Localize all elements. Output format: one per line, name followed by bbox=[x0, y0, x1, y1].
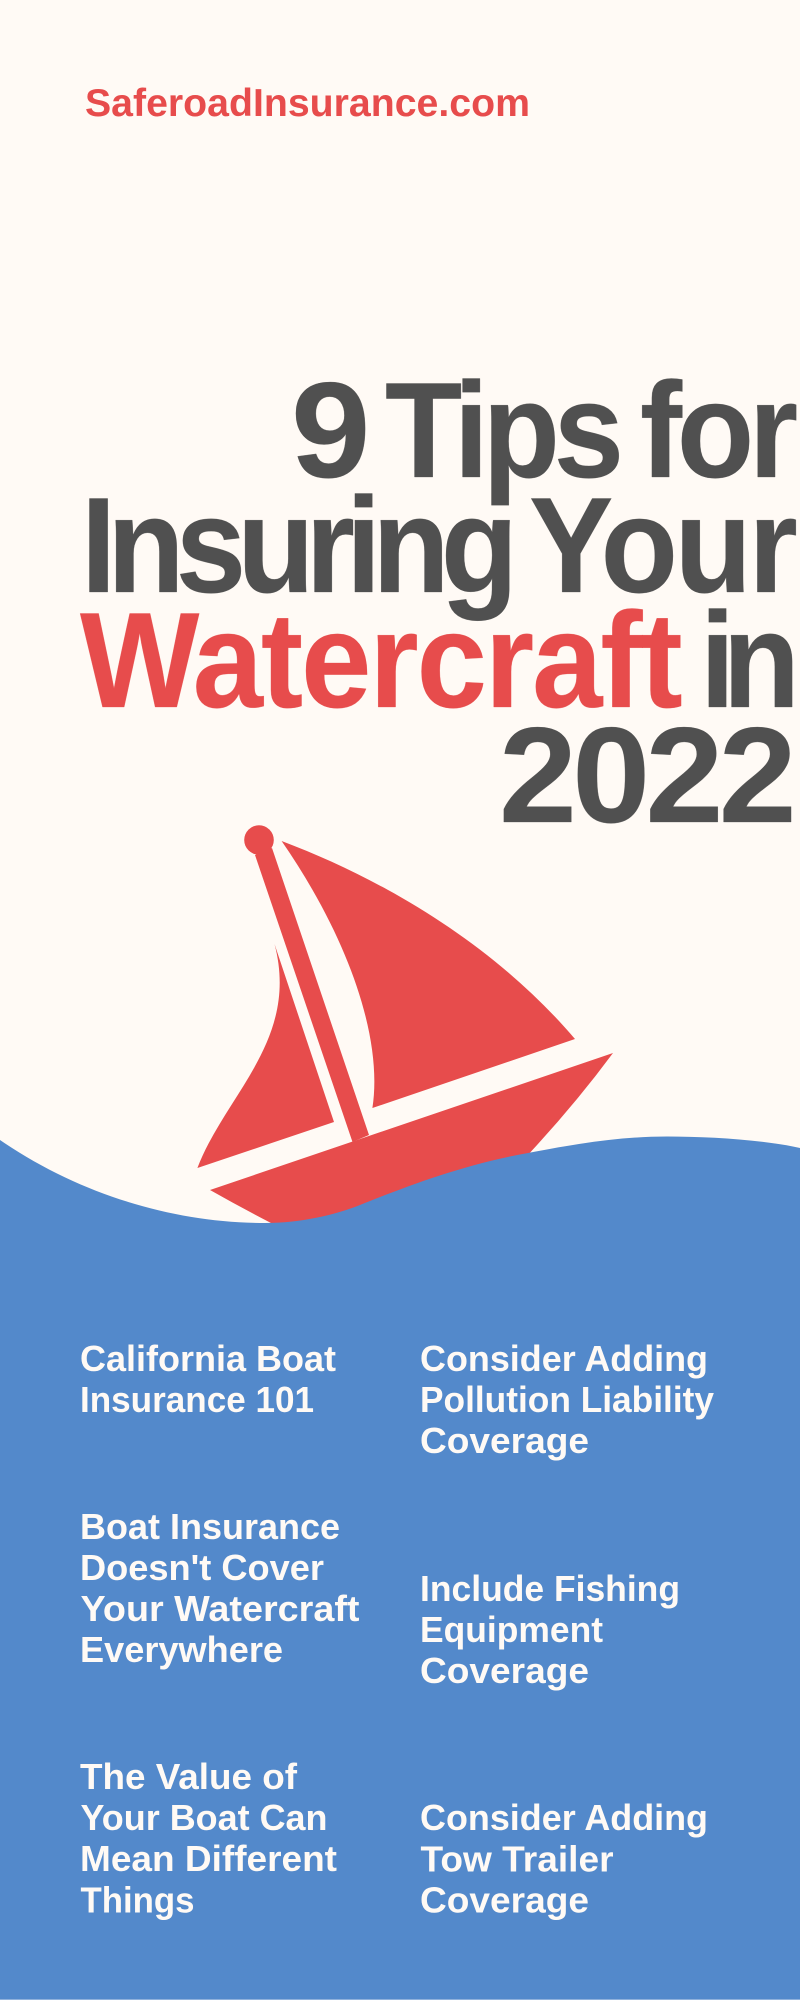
tip: Consider Adding Pollution Liability Coverage bbox=[420, 1338, 714, 1461]
tip: Boat Insurance Doesn't Cover Your Watercraft Everywhere bbox=[80, 1506, 360, 1670]
tip: Consider Adding Tow Trailer Coverage: Tow Trailer bbox=[420, 1838, 614, 1880]
brand heading: website name: SaferoadInsurance.com bbox=[85, 82, 530, 125]
title bbox=[80, 354, 800, 852]
tip: Consider Adding Pollution Liability Coverage: Coverage bbox=[420, 1420, 589, 1461]
title: 9 bbox=[291, 354, 370, 506]
tip: The Value of Your Boat Can Mean Different Things: The Value of bbox=[80, 1756, 298, 1797]
tip: California Boat Insurance 101: Insurance 101 bbox=[80, 1379, 314, 1420]
title: Your bbox=[529, 469, 798, 621]
tip: California Boat Insurance 101: California Boat bbox=[80, 1338, 336, 1379]
tip: Boat Insurance Doesn't Cover Your Watercraft Everywhere: Your Watercraft bbox=[80, 1588, 360, 1629]
tip: Include Fishing Equipment Coverage: Equipment bbox=[420, 1609, 603, 1650]
title: Tips bbox=[385, 354, 624, 506]
icon: red sailboat bbox=[197, 825, 613, 1223]
tip: Boat Insurance Doesn't Cover Your Watercraft Everywhere: Doesn't Cover bbox=[80, 1547, 324, 1588]
tip: The Value of Your Boat Can Mean Different Things: Your Boat Can bbox=[80, 1797, 328, 1838]
tip: Consider Adding Tow Trailer Coverage bbox=[420, 1797, 708, 1920]
tip: Include Fishing Equipment Coverage: Coverage bbox=[420, 1650, 589, 1691]
title: Watercraft bbox=[80, 584, 683, 736]
tip: California Boat Insurance 101 bbox=[80, 1338, 336, 1420]
tip: Consider Adding Tow Trailer Coverage: Consider Adding bbox=[420, 1797, 708, 1838]
tip: The Value of Your Boat Can Mean Different Things: Things bbox=[80, 1880, 194, 1920]
tip: Consider Adding Pollution Liability Coverage: Pollution Liability bbox=[420, 1379, 714, 1420]
title: 2022 bbox=[499, 700, 797, 852]
tip: Consider Adding Pollution Liability Coverage: Consider Adding bbox=[420, 1338, 708, 1379]
title: for bbox=[640, 354, 798, 506]
blue wave panel bbox=[0, 1136, 800, 2000]
tip: Boat Insurance Doesn't Cover Your Watercraft Everywhere: Everywhere bbox=[80, 1629, 283, 1670]
tip: Include Fishing Equipment Coverage: Include Fishing bbox=[420, 1568, 680, 1609]
title: in bbox=[700, 584, 800, 736]
tip: Boat Insurance Doesn't Cover Your Watercraft Everywhere: Boat Insurance bbox=[80, 1506, 340, 1547]
title: Insuring bbox=[81, 469, 518, 621]
tip: The Value of Your Boat Can Mean Different Things bbox=[80, 1756, 337, 1920]
tip: Include Fishing Equipment Coverage bbox=[420, 1568, 680, 1691]
tip: Consider Adding Tow Trailer Coverage: Coverage bbox=[420, 1880, 589, 1920]
tip: The Value of Your Boat Can Mean Different Things: Mean Different bbox=[80, 1838, 337, 1879]
